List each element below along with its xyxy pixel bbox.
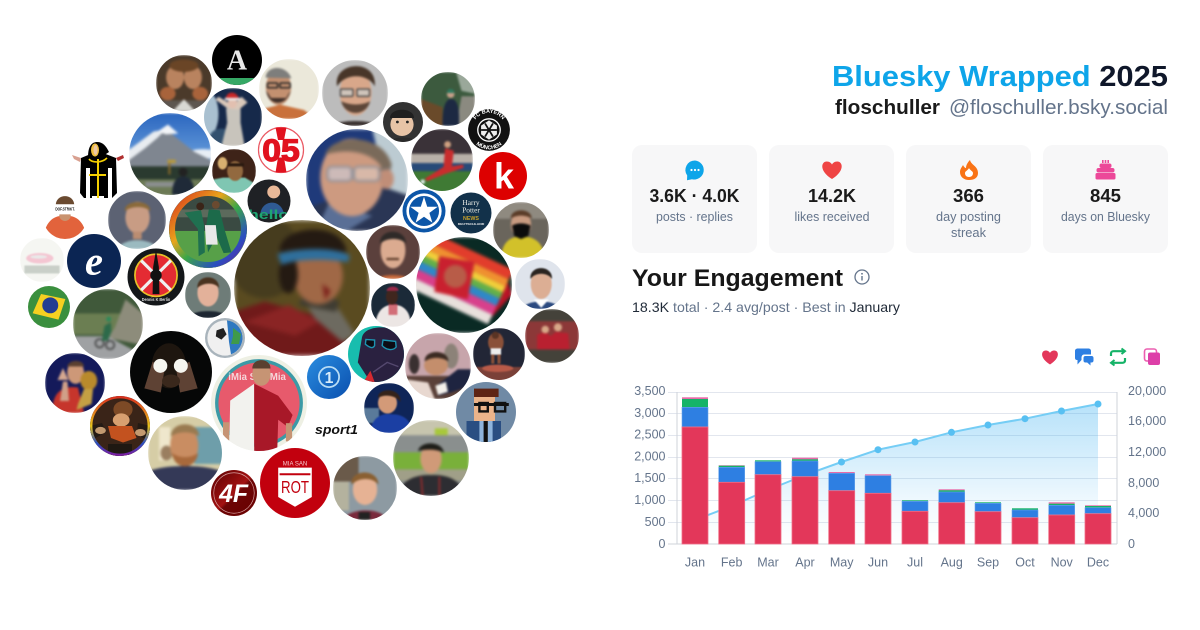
month labels: Aug — [941, 556, 963, 570]
avatar: Bayern duo — [525, 309, 579, 363]
month labels: Oct — [1015, 556, 1035, 570]
bar: Aug — [939, 489, 965, 544]
icon: info — [855, 270, 869, 284]
avatar: Harry Potter News: Potter — [462, 206, 480, 215]
handle line: @floschuller.bsky.social — [949, 97, 1168, 119]
icon: replies — [1075, 348, 1094, 366]
icon: quotes — [1144, 349, 1160, 365]
subtitle: 18.3K total · 2.4 avg/post · Best in January — [632, 299, 900, 315]
panel: likes received — [769, 145, 894, 253]
avatar: blond man — [108, 191, 166, 249]
heading: Your Engagement: Your Engagement — [632, 265, 843, 292]
month labels: Feb — [721, 556, 743, 570]
icon: reposts — [1111, 348, 1125, 366]
avatar: A logo — [212, 35, 262, 86]
right y axis labels: 8,000 — [1128, 476, 1159, 490]
avatar: A logo: A — [227, 46, 248, 76]
month labels — [685, 556, 1109, 570]
avatar: Mia badge: iMia San Mia — [228, 371, 286, 383]
left y axis labels: 3,500 — [634, 384, 666, 398]
avatar: star badge — [402, 190, 446, 232]
avatar: 4F logo — [211, 470, 257, 516]
month labels: Jan — [685, 556, 705, 570]
month labels: Dec — [1087, 556, 1109, 570]
month labels: Jun — [868, 556, 888, 570]
bar: Apr — [792, 458, 818, 544]
bar: Dec — [1085, 505, 1111, 544]
avatar: memoji — [383, 102, 423, 142]
avatar: cartoon — [90, 396, 150, 456]
panel: posts and replies — [632, 145, 757, 253]
avatar: e logo: e — [85, 239, 103, 283]
chart legend — [1042, 348, 1160, 366]
right y axis labels — [1128, 384, 1166, 551]
avatar: coach — [364, 383, 414, 433]
avatar: handball trophy — [45, 353, 105, 413]
panel: days on Bluesky: days on Bluesky — [1061, 210, 1151, 224]
avatar: pixel man — [456, 382, 516, 442]
right y axis labels: 16,000 — [1128, 414, 1166, 428]
avatar: TV presenter — [515, 259, 565, 309]
avatar: player shooting — [411, 129, 473, 193]
avatar: red and black emblem: Dennis K Berlin — [142, 297, 171, 302]
avatar: Mia San Rot — [260, 448, 330, 518]
panel: posts and replies: posts · replies — [656, 210, 733, 224]
bar: Nov — [1049, 502, 1075, 544]
left y axis labels: 1,000 — [634, 493, 666, 507]
left y axis labels: 500 — [645, 515, 666, 529]
avatar: Darth with glasses — [348, 326, 404, 382]
bar: Jul — [902, 500, 928, 544]
avatar: Brazil ball — [28, 286, 70, 328]
avatar: hello: hello — [248, 207, 289, 222]
bar: Sep — [975, 502, 1001, 544]
cumulative line — [695, 400, 1102, 520]
icon: heart — [822, 162, 842, 179]
avatar: man with glasses — [322, 60, 388, 126]
avatar: mirrored man — [156, 55, 212, 112]
bar: Feb — [719, 465, 745, 544]
icon: flame — [960, 160, 978, 180]
avatar: mountain — [129, 113, 219, 196]
avatar: dark with eyes — [130, 331, 212, 413]
panel: days on Bluesky: 845 — [1090, 186, 1121, 206]
month labels: Sep — [977, 556, 999, 570]
left y axis labels: 0 — [659, 537, 666, 551]
icon: Münchner Kindl figure — [72, 142, 124, 198]
icon: chat bubble — [685, 160, 704, 180]
panel: days on Bluesky — [1043, 145, 1168, 253]
avatar: cyclist — [73, 289, 143, 359]
avatar: Werder players — [169, 190, 247, 270]
month labels: Jul — [907, 556, 923, 570]
avatar: Mainz 05 — [258, 126, 304, 174]
avatar: Mia San Rot: MIA SAN — [283, 461, 307, 467]
avatar: Mia badge — [211, 355, 307, 451]
avatar: stadium roof — [20, 238, 64, 282]
avatar: FC Bayern badge: MÜNCHEN — [476, 142, 502, 150]
bar: Jan — [682, 397, 708, 544]
left y axis labels — [634, 384, 666, 551]
avatar: singer — [198, 88, 262, 146]
logo: sport1: sport1 — [315, 422, 358, 437]
avatar: hero with red cape — [227, 217, 370, 356]
right y axis labels: 12,000 — [1128, 445, 1166, 459]
avatar: red and black emblem — [128, 248, 184, 306]
title: Bluesky Wrapped 2025: Bluesky Wrapped 2025 — [832, 61, 1168, 93]
avatar: smiling bearded man — [148, 416, 224, 490]
avatar: rugby players — [405, 333, 471, 399]
avatar: kicker k: k — [494, 155, 515, 196]
left y axis labels: 1,500 — [634, 471, 666, 485]
chart: monthly engagement bars with cumulative line — [634, 384, 1166, 570]
month labels: May — [830, 556, 854, 570]
icon: likes — [1042, 350, 1058, 364]
avatar: Harry Potter News — [450, 192, 492, 234]
avatar: soccer globe — [205, 318, 245, 358]
avatar: masked fan — [493, 202, 549, 258]
panel: day posting streak: 366 — [953, 186, 984, 206]
avatar: Mainz 05: 05 — [262, 133, 300, 168]
avatar: Mia San Rot: ROT — [281, 477, 309, 497]
panel: likes received: 14.2K — [808, 186, 856, 206]
panel: day posting streak: day posting — [936, 210, 1001, 224]
avatar: thumbs-up man — [212, 149, 256, 193]
panel: likes received: likes received — [794, 210, 870, 224]
avatar: Harry Potter News: DEUTSCHLAND — [458, 222, 484, 226]
panel: posts and replies: 3.6K · 4.0K — [650, 186, 740, 206]
avatar: smiling man — [185, 272, 231, 318]
left y axis labels: 2,000 — [634, 450, 666, 464]
month labels: Nov — [1051, 556, 1074, 570]
panel: day posting streak — [906, 145, 1031, 253]
cumulative area — [695, 404, 1098, 544]
right y axis labels: 0 — [1128, 537, 1135, 551]
avatar: man by bricks — [366, 225, 420, 279]
month labels: Apr — [795, 556, 815, 570]
avatar: Bayern player — [371, 283, 415, 327]
bar: Mar — [755, 460, 781, 544]
avatar: 4F logo: 4F — [218, 481, 249, 508]
avatar: rainbow armband — [416, 237, 512, 333]
avatar: kicker k — [479, 152, 527, 200]
avatar: cap man — [259, 59, 319, 119]
handle line — [835, 97, 1168, 119]
avatar: Harry Potter News: Harry — [462, 198, 480, 207]
avatar: FC Bayern badge: FC BAYERN — [472, 109, 505, 120]
left y axis labels: 3,000 — [634, 406, 666, 420]
right y axis labels: 4,000 — [1128, 506, 1159, 520]
month labels: Mar — [757, 556, 779, 570]
avatar: e logo — [67, 234, 121, 288]
icon: cake — [1096, 160, 1116, 180]
bar: Oct — [1012, 508, 1038, 544]
avatar: Das Erste: 1 — [325, 370, 334, 387]
bar: May — [829, 472, 855, 544]
right y axis labels: 20,000 — [1128, 384, 1166, 398]
avatar: hello — [248, 180, 290, 222]
bar: Jun — [865, 474, 891, 544]
avatar: Harry Potter News: NEWS — [463, 216, 479, 222]
panel: day posting streak: streak — [951, 226, 987, 240]
avatar cloud — [20, 35, 579, 520]
avatar: blond man selfie — [333, 456, 397, 520]
avatar: boxing — [473, 328, 525, 383]
avatar: Das Erste — [307, 355, 351, 399]
avatar: orange hood — [46, 196, 84, 239]
avatar: large profile portrait — [306, 129, 408, 231]
avatar: orange hood: DOF.STRIKT. — [55, 207, 75, 212]
avatar: man at stadium — [393, 420, 469, 496]
avatar: FC Bayern badge — [468, 109, 510, 151]
handle line: floschuller — [835, 97, 940, 119]
left y axis labels: 2,500 — [634, 428, 666, 442]
avatar: man on path — [421, 72, 475, 126]
grid lines — [668, 392, 1117, 544]
